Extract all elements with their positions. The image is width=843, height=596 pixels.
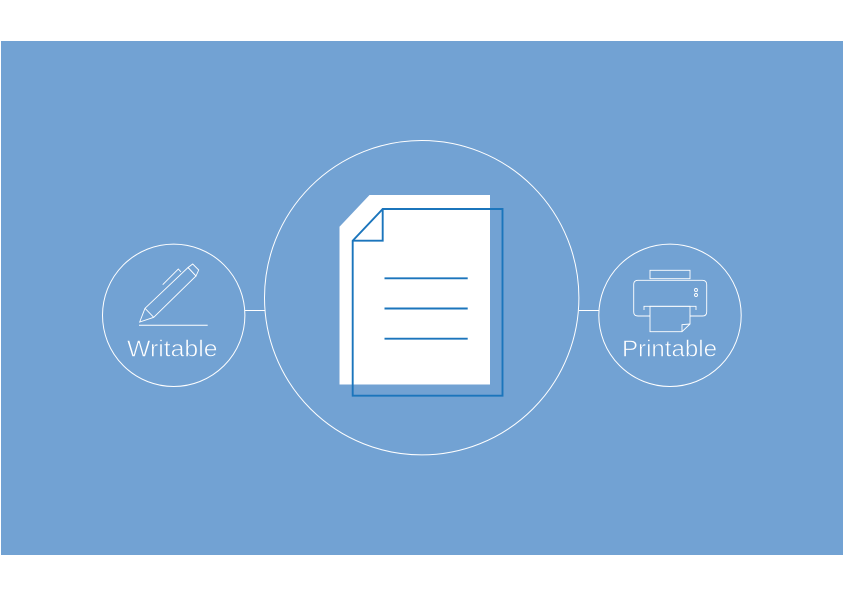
- label: Writable: Writable: [127, 336, 218, 362]
- icon: pen: [139, 264, 208, 325]
- label: Printable: Printable: [622, 336, 717, 362]
- panel: printable: [599, 244, 741, 386]
- icon: printer: [634, 270, 707, 332]
- panel: writable: [102, 244, 245, 386]
- connector: writable to document: [245, 310, 265, 312]
- central document circle: [264, 141, 579, 455]
- icon: white document sheet: [340, 195, 490, 384]
- icon: blue document outline: [353, 209, 502, 396]
- connector: document to printable: [579, 310, 599, 312]
